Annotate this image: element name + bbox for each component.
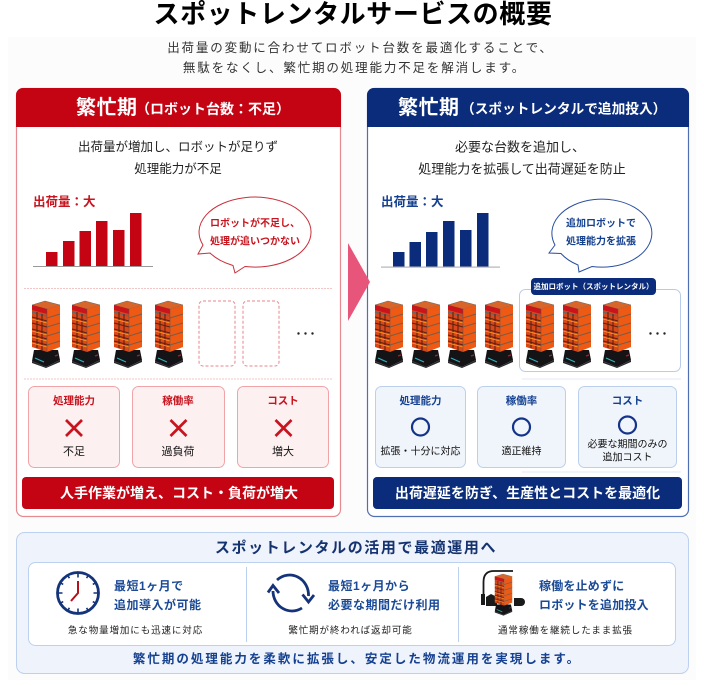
card: utilization overload bbox=[132, 386, 224, 468]
panel header: after bbox=[367, 88, 689, 127]
speech bubble: after bbox=[549, 199, 652, 272]
benefit 1 note: 急な物量増加にも迅速に対応 bbox=[68, 624, 203, 636]
card: cost only as needed bbox=[578, 386, 676, 468]
robots: after bbox=[375, 301, 631, 368]
benefits summary: 繁忙期の処理能力を柔軟に拡張し、安定した物流運用を実現します。 bbox=[133, 651, 581, 666]
benefit 1 heading: 最短1ヶ月で bbox=[114, 578, 184, 593]
card: utilization maintained bbox=[478, 386, 566, 468]
result band: after: 出荷遅延を防ぎ、生産性とコストを最適化 bbox=[395, 485, 660, 501]
speech bubble: before: ロボットが不足し、 bbox=[210, 216, 300, 230]
description: before bbox=[78, 139, 278, 176]
card: cost only as needed: コスト bbox=[612, 395, 643, 407]
panel header: before: （ロボット台数：不足） bbox=[136, 101, 290, 117]
card: cost only as needed: 追加コスト bbox=[602, 450, 652, 464]
description: after: 処理能力を拡張して出荷遅延を防止 bbox=[418, 162, 626, 176]
speech bubble: after: 追加ロボットで bbox=[566, 216, 636, 230]
result band: after bbox=[373, 477, 682, 509]
robots: before bbox=[32, 301, 183, 368]
bar chart: before bbox=[33, 213, 153, 267]
benefit 2 bbox=[268, 575, 441, 636]
panel header: after: （スポットレンタルで追加投入） bbox=[461, 100, 666, 116]
result band: before bbox=[22, 477, 334, 509]
added robots label: 追加ロボット（スポットレンタル） bbox=[534, 281, 654, 291]
card: utilization overload: 稼働率 bbox=[162, 394, 194, 407]
card: capacity expanded bbox=[376, 386, 466, 468]
panel header: before: 繁忙期 bbox=[76, 96, 138, 119]
card: cost increase: コスト bbox=[267, 395, 299, 407]
icon: clock bbox=[58, 572, 98, 614]
added robots label bbox=[531, 278, 656, 295]
icon: cycle arrows bbox=[268, 575, 314, 611]
speech bubble: after: 処理能力を拡張 bbox=[566, 234, 636, 248]
benefit 1 bbox=[58, 572, 203, 636]
benefit 1 heading: 追加導入が可能 bbox=[114, 597, 202, 612]
panel: benefits bbox=[16, 532, 688, 674]
card: cost only as needed: 必要な期間のみの bbox=[588, 438, 668, 450]
empty robot slots bbox=[199, 301, 279, 366]
card: capacity shortage: 処理能力 bbox=[53, 394, 95, 407]
panel header: after: 繁忙期 bbox=[398, 96, 460, 119]
benefit 3 heading: ロボットを追加投入 bbox=[539, 597, 649, 612]
speech bubble: before bbox=[198, 197, 311, 273]
card: capacity shortage bbox=[28, 386, 120, 468]
benefit 2 heading: 最短1ヶ月から bbox=[328, 578, 410, 593]
description: before: 処理能力が不足 bbox=[134, 161, 222, 176]
bar chart: after bbox=[381, 213, 500, 268]
description: after bbox=[418, 140, 626, 176]
intro text: 無駄をなくし、繁忙期の処理能力不足を解消します。 bbox=[183, 60, 526, 75]
ellipsis: before bbox=[297, 332, 314, 335]
benefit 3 note: 通常稼働を継続したまま拡張 bbox=[498, 624, 633, 636]
intro text bbox=[167, 40, 554, 75]
card: capacity expanded: 拡張・十分に対応 bbox=[380, 444, 460, 458]
benefit 1 heading bbox=[114, 578, 202, 612]
card: utilization maintained: 稼働率 bbox=[506, 394, 538, 407]
chart label: before: 出荷量：大 bbox=[33, 194, 96, 209]
benefit 2 heading bbox=[328, 578, 441, 612]
benefit 3 heading: 稼働を止めずに bbox=[539, 578, 624, 593]
chart label: after: 出荷量：大 bbox=[381, 194, 444, 209]
result band: before: 人手作業が増え、コスト・負荷が増大 bbox=[60, 485, 298, 501]
speech bubble: before: 処理が追いつかない bbox=[210, 234, 300, 248]
arrow: before to after bbox=[348, 243, 370, 321]
benefits inner card bbox=[28, 562, 676, 646]
card: cost increase: 増大 bbox=[272, 444, 294, 458]
benefit 2 note: 繁忙期が終われば返却可能 bbox=[288, 624, 413, 636]
benefits heading: スポットレンタルの活用で最適運用へ bbox=[215, 538, 497, 556]
intro text: 出荷量の変動に合わせてロボット台数を最適化することで、 bbox=[167, 40, 554, 55]
benefit 2 heading: 必要な期間だけ利用 bbox=[328, 597, 441, 612]
card: capacity expanded: 処理能力 bbox=[400, 394, 442, 407]
card: utilization overload: 過負荷 bbox=[162, 445, 194, 458]
added robots frame bbox=[520, 290, 680, 372]
benefit 3 heading bbox=[539, 578, 649, 612]
benefit 3 bbox=[481, 571, 649, 636]
panel: before (shortage) bbox=[16, 88, 341, 516]
description: after: 必要な台数を追加し、 bbox=[455, 140, 585, 154]
description: before: 出荷量が増加し、ロボットが足りず bbox=[78, 139, 278, 154]
panel header: before bbox=[16, 88, 341, 127]
ellipsis: after bbox=[649, 332, 666, 335]
card: capacity shortage: 不足 bbox=[63, 446, 85, 458]
card: utilization maintained: 適正維持 bbox=[502, 444, 542, 458]
card: cost increase bbox=[238, 386, 328, 468]
icon: robot with charger bbox=[481, 571, 525, 616]
panel: after (spot rental) bbox=[367, 88, 689, 516]
